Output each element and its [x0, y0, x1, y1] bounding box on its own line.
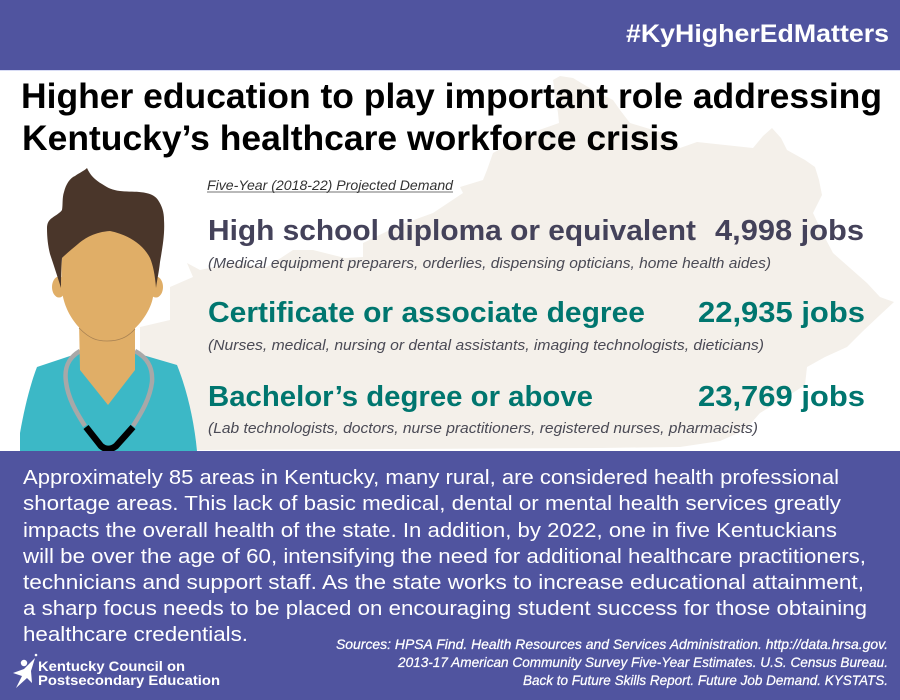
stethoscope tubing	[66, 351, 152, 426]
title: Higher education to play important role addressing	[21, 77, 882, 116]
figure: healthcare worker with stethoscope	[20, 168, 197, 451]
row: certificate: (Nurses, medical, nursing or dental assistants, imaging technologists, dieticians)	[208, 337, 764, 354]
row: high school: High school diploma or equivalent	[208, 215, 697, 247]
chin shadow	[79, 328, 135, 341]
body paragraph	[22, 466, 867, 646]
sources: 2013-17 American Community Survey Five-Year Estimates. U.S. Census Bureau.	[397, 654, 888, 670]
row: certificate: 22,935 jobs	[698, 297, 865, 329]
body paragraph: impacts the overall health of the state. In addition, by 2022, one in five Kentuckians	[23, 519, 837, 542]
Kentucky map silhouette	[140, 76, 894, 450]
logo wordmark: Kentucky Council on	[38, 658, 185, 674]
row: bachelor: Bachelor’s degree or above	[208, 381, 593, 413]
hashtag: #KyHigherEdMatters	[626, 20, 889, 48]
footer panel	[0, 451, 900, 700]
shirt	[20, 353, 197, 451]
body paragraph: Approximately 85 areas in Kentucky, many rural, are considered health professional	[23, 466, 839, 489]
logo: Kentucky Council on Postsecondary Education	[13, 654, 220, 688]
sources: Back to Future Skills Report. Future Job Demand. KYSTATS.	[523, 672, 888, 688]
row: bachelor	[208, 381, 865, 437]
title	[21, 77, 882, 158]
row: certificate	[208, 297, 865, 354]
header band	[0, 0, 900, 70]
body paragraph: healthcare credentials.	[23, 623, 248, 646]
row: bachelor: 23,769 jobs	[698, 381, 865, 413]
sources	[336, 636, 888, 688]
body paragraph: a sharp focus needs to be placed on encouraging student success for those obtaining	[23, 597, 867, 620]
sources: Sources: HPSA Find. Health Resources and Services Administration. http://data.hrsa.gov.	[336, 636, 888, 652]
body paragraph: technicians and support staff. As the state works to increase educational attainment,	[23, 571, 864, 594]
row: bachelor: (Lab technologists, doctors, nurse practitioners, registered nurses, pharmacists)	[208, 420, 758, 437]
face	[61, 231, 156, 341]
icon: reaching figure	[13, 654, 37, 688]
header edge highlight	[0, 70, 900, 71]
body paragraph: will be over the age of 60, intensifying the need for additional healthcare practitioners,	[22, 545, 866, 568]
body paragraph: shortage areas. This lack of basic medical, dental or mental health services greatly	[23, 492, 842, 515]
row: certificate: Certificate or associate degree	[208, 297, 645, 329]
neck	[79, 320, 135, 405]
logo wordmark: Postsecondary Education	[38, 672, 220, 688]
hair	[47, 168, 164, 288]
ears	[52, 276, 66, 298]
row: high school: (Medical equipment preparers, orderlies, dispensing opticians, home health aides)	[208, 255, 771, 272]
title: Kentucky’s healthcare workforce crisis	[22, 119, 679, 158]
logo wordmark	[38, 658, 220, 688]
stethoscope earpieces	[86, 427, 133, 449]
row: high school	[208, 215, 864, 272]
row: high school: 4,998 jobs	[715, 215, 864, 247]
chart subtitle: Five-Year (2018-22) Projected Demand	[207, 177, 454, 193]
